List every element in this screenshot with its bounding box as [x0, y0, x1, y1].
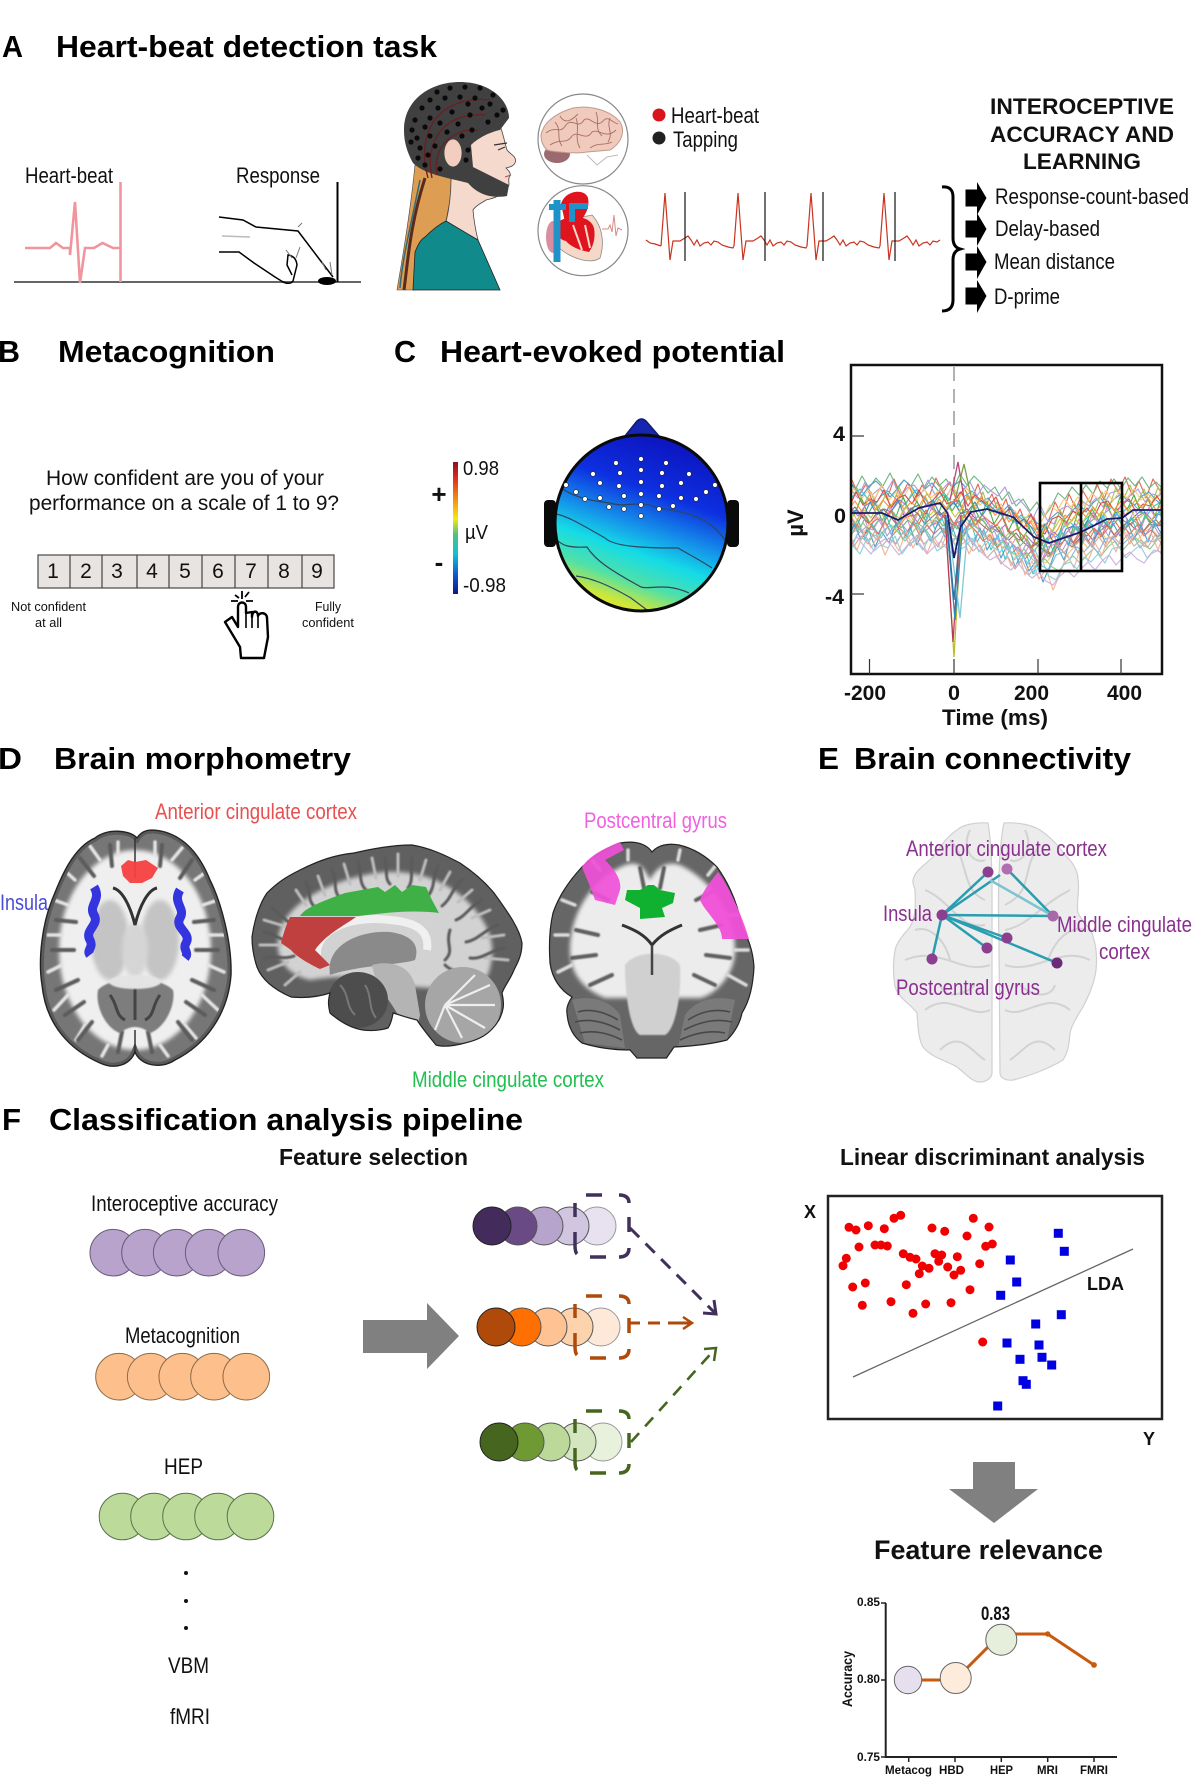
confidence scale 1 to 9: 2 [80, 560, 92, 583]
feature relevance line chart: Metacog [885, 1765, 932, 1777]
axis labels: -4 [825, 586, 844, 609]
purple feature selection row [473, 1195, 716, 1314]
grey arrow to feature selection [363, 1303, 459, 1369]
tapping hand [219, 182, 338, 285]
panel D: brain morphometry [0, 741, 756, 1092]
label: Postcentral gyrus: Postcentral gyrus [584, 808, 727, 833]
colour bar with scale labels [431, 458, 506, 597]
label: Heart-beat: Heart-beat [25, 163, 113, 188]
panel A: heart-beat detection task [2, 29, 1189, 313]
axial brain slice [36, 825, 236, 1070]
axis labels: -200 [844, 682, 886, 705]
question text [29, 467, 339, 515]
feature relevance line chart [840, 1597, 1117, 1777]
brain illustration in circle [538, 94, 628, 184]
feature group: metacognition [96, 1323, 270, 1400]
ERP waveform chart [783, 365, 1186, 730]
grey arrow to feature relevance [949, 1462, 1038, 1523]
LDA scatter plot: LDA [1087, 1274, 1124, 1294]
scale anchor: not confident at all: at all [35, 615, 62, 630]
coronal brain slice [548, 840, 756, 1060]
label: Anterior cingulate cortex: Anterior cingulate cortex [155, 799, 357, 824]
connectivity edges [932, 869, 1057, 963]
panel letter E: E [818, 741, 839, 776]
axis labels: 4 [833, 423, 845, 446]
axis labels: 200 [1014, 682, 1049, 705]
colour bar with scale labels: µV [465, 522, 489, 544]
arrows and accuracy measures list: D-prime [994, 284, 1060, 309]
woman wearing EEG cap [397, 82, 516, 290]
ECG trace with tapping markers [646, 192, 940, 261]
feature group: interoceptive accuracy [90, 1191, 278, 1276]
labels on connectivity brain: Anterior cingulate cortex [906, 836, 1107, 861]
heart illustration in circle [538, 186, 628, 276]
labels on connectivity brain: cortex [1099, 939, 1150, 964]
coloured single-channel traces [852, 472, 1161, 590]
feature relevance line chart: Accuracy [840, 1651, 855, 1707]
arrows and accuracy measures list: Delay-based [995, 216, 1100, 241]
feature relevance line chart: 0.75 [857, 1752, 881, 1764]
panel E: brain connectivity [818, 741, 1192, 1082]
green feature selection row [480, 1348, 716, 1473]
confidence scale 1 to 9: 8 [278, 560, 290, 583]
feature relevance line chart: 0.80 [857, 1674, 880, 1686]
feature group: HEP: HEP [164, 1454, 203, 1479]
question text: performance on a scale of 1 to 9? [29, 492, 339, 515]
label: VBM: VBM [168, 1653, 209, 1678]
label: Response: Response [236, 163, 320, 188]
colour bar with scale labels: 0.98 [463, 458, 499, 480]
heading: Heart-beat detection task: Heart-beat detection task [56, 29, 438, 64]
label: Insula: Insula [0, 890, 49, 915]
colour bar with scale labels: + [431, 479, 447, 509]
heading: interoceptive accuracy and learning [990, 94, 1174, 174]
heading: Classification analysis pipeline: Classification analysis pipeline [49, 1102, 523, 1137]
subheading: Feature selection: Feature selection [279, 1144, 468, 1170]
scalp topography map [544, 419, 739, 611]
scale anchor: not confident at all: Not confident [11, 599, 86, 614]
axis labels: µV [783, 509, 808, 537]
heading: Metacognition: Metacognition [58, 334, 275, 369]
panel letter C: C [394, 334, 416, 369]
legend: Heart-beat and Tapping: Heart-beat [671, 103, 759, 128]
panel F: classification analysis pipeline [2, 1102, 1162, 1777]
feature group: metacognition: Metacognition [125, 1323, 240, 1348]
feature relevance line chart: 0.83 [981, 1604, 1010, 1625]
LDA scatter plot [804, 1196, 1162, 1449]
axis labels: Time (ms) [942, 705, 1048, 730]
label: fMRI: fMRI [170, 1704, 210, 1729]
heading: Heart-evoked potential: Heart-evoked potential [440, 334, 785, 369]
panel letter A: A [2, 29, 23, 64]
orange feature selection row [477, 1296, 692, 1358]
heading: interoceptive accuracy and learning: INTEROCEPTIVE [990, 94, 1174, 119]
icon: pointing hand [225, 591, 268, 658]
confidence scale 1 to 9: 4 [146, 560, 158, 583]
feature relevance line chart: FMRI [1080, 1765, 1108, 1777]
scale anchor: fully confident: Fully [315, 599, 341, 614]
confidence scale 1 to 9: 7 [245, 560, 257, 583]
axis labels: 400 [1107, 682, 1142, 705]
mean waveform [851, 503, 1162, 558]
arrows and accuracy measures list: Mean distance [994, 249, 1115, 274]
axis labels [783, 423, 1142, 730]
subheading: Linear discriminant analysis: Linear discriminant analysis [840, 1144, 1145, 1170]
feature relevance line chart: 0.85 [857, 1597, 881, 1609]
colour bar with scale labels: - [435, 547, 443, 577]
labels on connectivity brain: Postcentral gyrus [896, 975, 1040, 1000]
scale anchor: fully confident: confident [302, 615, 354, 630]
panel C: heart-evoked potential [394, 334, 1186, 730]
curly brace [942, 187, 960, 311]
confidence scale 1 to 9 [38, 555, 334, 588]
feature relevance line chart: MRI [1037, 1765, 1058, 1777]
feature relevance line chart: HBD [939, 1765, 964, 1777]
ellipsis dots [184, 1571, 188, 1630]
labels on connectivity brain [883, 836, 1192, 1000]
label: Middle cingulate cortex: Middle cingulate cortex [412, 1067, 604, 1092]
scale anchor: fully confident [302, 599, 354, 630]
heading: interoceptive accuracy and learning: LEARNING [1023, 149, 1141, 174]
question text: How confident are you of your [46, 467, 324, 490]
confidence scale 1 to 9: 5 [179, 560, 191, 583]
feature group: interoceptive accuracy: Interoceptive accuracy [91, 1191, 278, 1216]
analysis windows [1040, 483, 1122, 571]
axis labels: 0 [834, 505, 846, 528]
LDA scatter plot: X [804, 1202, 816, 1222]
feature group: HEP [99, 1454, 274, 1540]
sagittal brain slice [250, 843, 525, 1048]
LDA scatter plot: Y [1143, 1429, 1155, 1449]
colour bar with scale labels: -0.98 [463, 575, 506, 597]
pink ECG pulse [25, 182, 120, 283]
legend: Heart-beat and Tapping [652, 103, 759, 152]
baseline of task diagram [14, 281, 361, 283]
heading: Brain morphometry: Brain morphometry [54, 741, 352, 776]
heading: Feature relevance: Feature relevance [874, 1535, 1103, 1565]
scale anchor: not confident at all [11, 599, 86, 630]
arrows and accuracy measures list [966, 182, 1189, 313]
confidence scale 1 to 9: 1 [47, 560, 59, 583]
panel letter F: F [2, 1102, 21, 1137]
connectivity nodes [926, 864, 1062, 968]
confidence scale 1 to 9: 9 [311, 560, 323, 583]
axis labels: 0 [948, 682, 960, 705]
feature relevance line chart: HEP [990, 1765, 1013, 1777]
confidence scale 1 to 9: 6 [212, 560, 224, 583]
heading: interoceptive accuracy and learning: ACCURACY AND [990, 122, 1174, 147]
legend: Heart-beat and Tapping: Tapping [673, 127, 738, 152]
evoked negative spike [945, 462, 974, 657]
confidence scale 1 to 9: 3 [111, 560, 123, 583]
labels on connectivity brain: Insula [883, 901, 933, 926]
glass brain [894, 823, 1097, 1082]
panel B: metacognition [0, 334, 354, 658]
heading: Brain connectivity: Brain connectivity [854, 741, 1132, 776]
